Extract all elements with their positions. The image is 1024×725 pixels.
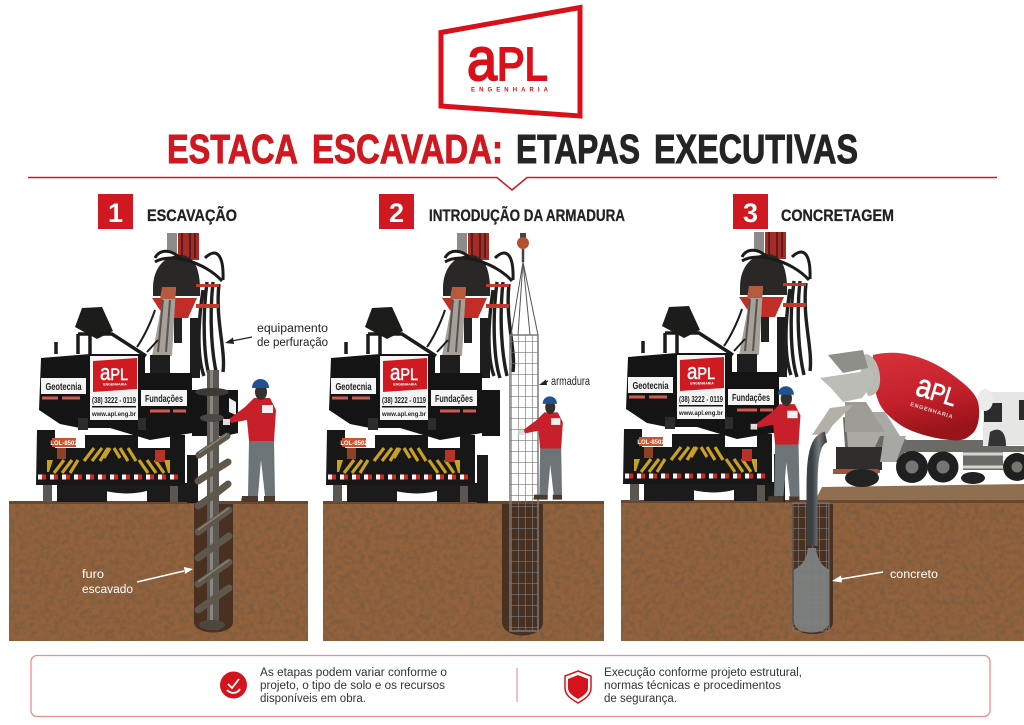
note: etapas — [260, 667, 447, 705]
note: execução — [604, 667, 802, 705]
title: ESTACA — [167, 126, 298, 172]
icon: check seal — [220, 672, 247, 698]
rig branding step 1: (38) 3222 - 0119 — [92, 396, 136, 405]
rig branding step 1: Fundações — [145, 394, 183, 405]
auger — [195, 370, 229, 630]
logo: APL Engenharia: aPL — [467, 26, 548, 94]
rig branding step 3: ENGENHARIA — [690, 382, 714, 386]
cage step 3 — [793, 503, 829, 631]
worker step 3 — [751, 386, 800, 502]
label: equipamento de perfuração: equipamento — [257, 323, 328, 335]
title: ESCAVADA: — [312, 126, 503, 172]
reinforcement cage — [510, 335, 538, 631]
truck cab — [983, 392, 1024, 445]
step 1 heading: ESCAVAÇÃO — [147, 205, 237, 225]
hole step 2 — [502, 504, 543, 636]
worker step 2 — [518, 396, 563, 500]
rig branding step 2: (38) 3222 - 0119 — [382, 396, 426, 405]
chassis — [836, 417, 1024, 473]
rig branding step 1: www.apl.eng.br — [91, 412, 137, 418]
rig branding step 3 — [632, 361, 770, 446]
label: concreto: concreto — [890, 569, 938, 581]
rig branding step 3: LOL-8502 — [637, 440, 665, 446]
label: equipamento de perfuração — [225, 323, 328, 349]
rig branding step 3: Fundações — [732, 393, 770, 404]
rig branding step 1: Geotecnia — [46, 382, 82, 393]
drum logo: ENGENHARIA — [909, 402, 953, 420]
logo: APL Engenharia: ENGENHARIA — [471, 88, 549, 94]
rig branding step 2: www.apl.eng.br — [381, 412, 427, 418]
panel: soil step 3 — [621, 484, 1024, 641]
label: furo escavado — [82, 567, 193, 596]
rig branding step 3: Geotecnia — [632, 381, 669, 392]
hopper, collar and chute — [860, 354, 880, 396]
concrete mixer truck — [812, 350, 1024, 487]
rig branding step 2: ENGENHARIA — [393, 382, 417, 386]
title — [167, 126, 858, 172]
rig branding step 3: aPL — [687, 361, 715, 384]
label: furo escavado: furo — [82, 569, 104, 581]
step 2 heading: INTRODUÇÃO DA ARMADURA — [429, 205, 625, 225]
rig branding step 2: LOL-8502 — [340, 441, 368, 447]
icon: shield — [565, 671, 591, 703]
rig branding step 3: www.apl.eng.br — [678, 411, 724, 417]
tremie pipe — [812, 437, 826, 546]
step 2 heading — [379, 194, 625, 229]
note: execução: normas técnicas e procedimentos — [604, 680, 781, 692]
worker step 1 — [223, 379, 276, 502]
label: armadura — [539, 376, 590, 388]
panel: footer notes — [31, 656, 990, 716]
step 3 heading: CONCRETAGEM — [781, 206, 894, 225]
drilling rig step 1 — [36, 233, 224, 503]
hole step 1 — [194, 504, 233, 632]
panel: soil step 2 — [323, 501, 604, 641]
rig branding step 1 — [46, 362, 183, 447]
label: furo escavado: escavado — [82, 584, 133, 596]
panel: soil step 1 — [9, 501, 308, 641]
logo: APL Engenharia — [441, 8, 580, 116]
label: armadura: armadura — [551, 376, 590, 388]
concrete column — [794, 548, 829, 632]
label: equipamento de perfuração: de perfuração — [257, 337, 328, 349]
title: ETAPAS — [516, 126, 640, 172]
step 1 heading: 1 — [108, 198, 123, 228]
rig branding step 3: (38) 3222 - 0119 — [679, 395, 723, 404]
step 3 heading: 3 — [743, 198, 758, 228]
auger platform step 2 — [482, 390, 500, 436]
drilling rig step 2 — [326, 233, 514, 503]
auger platform — [192, 390, 238, 436]
step 2 heading: 2 — [389, 198, 404, 228]
note: etapas: As etapas podem variar conforme o — [260, 667, 447, 679]
note: execução: de segurança. — [604, 693, 677, 705]
step 1 heading — [98, 194, 237, 229]
rig branding step 1: ENGENHARIA — [103, 382, 127, 386]
rig branding step 1: aPL — [100, 362, 128, 385]
label: concreto — [832, 569, 938, 582]
rig branding step 2 — [336, 362, 473, 447]
step 3 heading — [733, 194, 894, 229]
icon: crane hook and slings — [511, 233, 538, 335]
rig branding step 2: aPL — [390, 362, 418, 385]
note: execução: Execução conforme projeto estrutural, — [604, 667, 802, 679]
rig branding step 2: Fundações — [435, 394, 473, 405]
rig branding step 2: Geotecnia — [336, 382, 372, 393]
note: etapas: projeto, o tipo de solo e os recursos — [260, 680, 445, 692]
rig branding step 1: LOL-8502 — [50, 441, 78, 447]
drum logo: aPL — [912, 368, 962, 414]
title: EXECUTIVAS — [654, 126, 858, 172]
drilling rig step 3 — [623, 232, 811, 502]
hole step 3 — [792, 504, 833, 634]
mixer drum — [872, 353, 979, 440]
note: etapas: disponíveis em obra. — [260, 693, 366, 705]
